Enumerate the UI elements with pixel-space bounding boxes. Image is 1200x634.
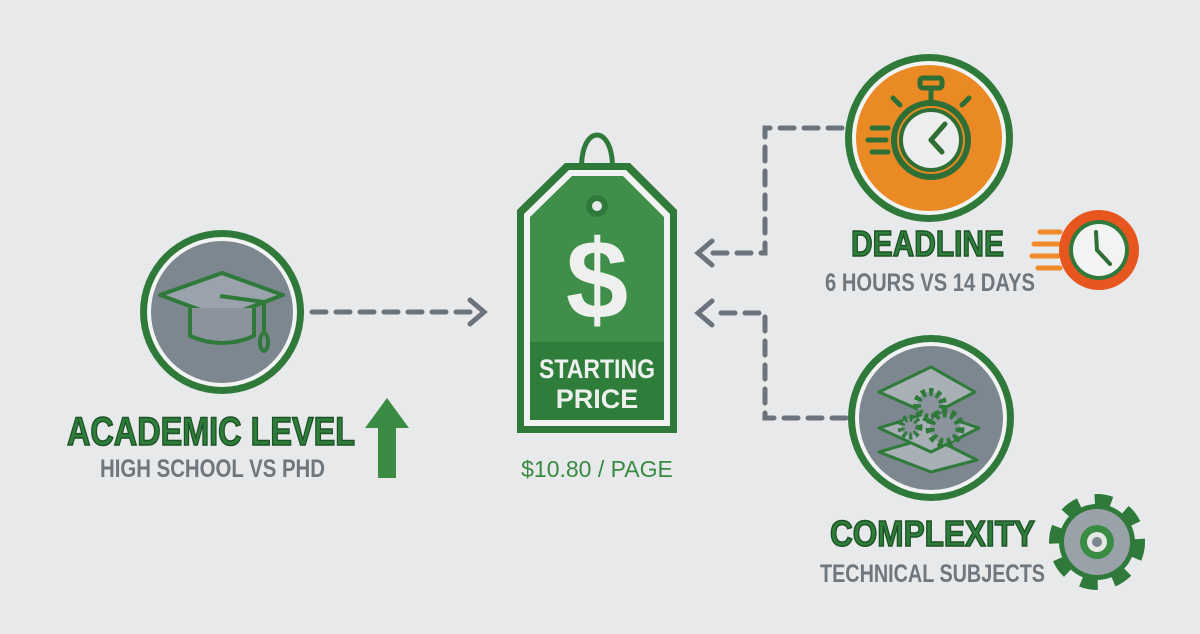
arrow: academic to price: [312, 300, 484, 324]
heading: deadline: DEADLINE: [851, 223, 1004, 264]
icon: graduation cap: [160, 273, 283, 351]
icon: stopwatch: [868, 78, 969, 177]
subtitle: technical subjects: TECHNICAL SUBJECTS: [820, 560, 1045, 588]
icon: fast clock: [1032, 210, 1139, 290]
price value: $10.80 / PAGE: [521, 456, 673, 482]
price tag: [517, 135, 677, 433]
subtitle: 6 hours vs 14 days: 6 HOURS VS 14 DAYS: [825, 269, 1035, 297]
icon: academic circle: [140, 230, 304, 394]
arrow: complexity to price: [698, 301, 846, 418]
price tag: PRICE: [556, 384, 638, 414]
icon: complexity circle: [848, 335, 1014, 501]
arrow: deadline to price: [698, 128, 842, 265]
icon: layered gears: [879, 367, 979, 472]
icon: dollar sign: $: [566, 217, 628, 342]
subtitle: high school vs phd: HIGH SCHOOL VS PHD: [100, 455, 325, 483]
icon: up arrow: [365, 398, 409, 478]
icon: deadline circle: [845, 54, 1013, 222]
heading: academic level: ACADEMIC LEVEL: [67, 410, 355, 454]
label: starting price: STARTING: [539, 354, 655, 384]
icon: gear: [1057, 502, 1137, 582]
heading: complexity: COMPLEXITY: [830, 513, 1035, 554]
